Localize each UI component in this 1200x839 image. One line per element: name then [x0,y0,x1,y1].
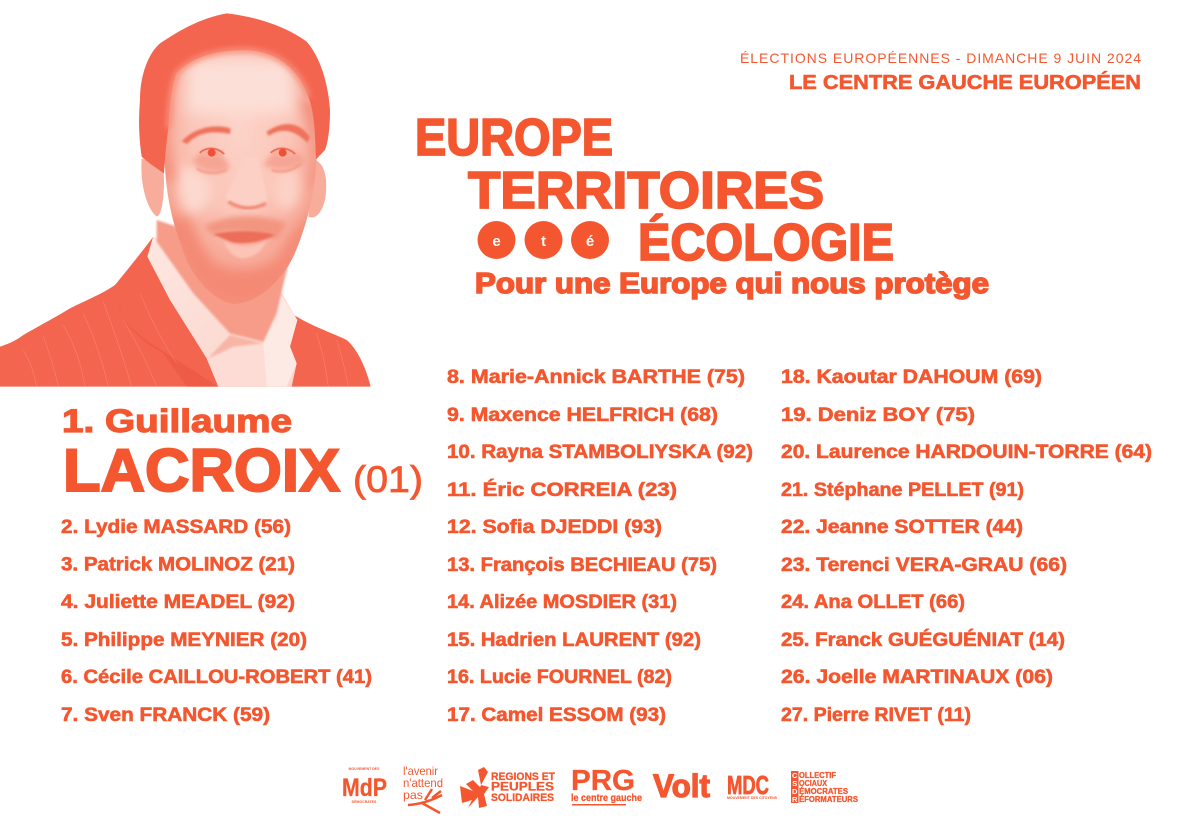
party logos row [342,764,859,813]
logo: MdP: MOUVEMENT DES [349,767,380,771]
candidate surname: LACROIX [63,437,340,504]
candidate list: column 2: 9. Maxence HELFRICH (68) [447,405,718,426]
title line: Écologie: ÉCOLOGIE [638,214,894,272]
candidate list: column 1: 7. Sven FRANCK (59) [61,705,270,726]
icon: e t é circles [478,221,609,259]
photo: Guillaume Lacroix portrait [0,13,371,387]
logo: MDC: MDC [727,770,769,800]
candidate list: column 3 [781,367,1152,726]
logo: Collectif Sociaux Démocrates Réformateurs: ÉMOCRATES [799,787,849,796]
icon: e t é circles: t [541,233,546,250]
logo: Volt: Volt [653,768,710,804]
icon: e t é circles: e [492,233,501,250]
candidate list: column 2: 15. Hadrien LAURENT (92) [447,630,701,651]
logo: Collectif Sociaux Démocrates Réformateurs: R [792,795,798,804]
candidate list: column 3: 26. Joelle MARTINAUX (06) [781,667,1053,688]
candidate list: column 1: 5. Philippe MEYNIER (20) [61,630,307,651]
logo: l'avenir n'attend pas: n'attend [403,776,443,790]
title line: Territoires: TERRITOIRES [468,162,824,220]
logo: Régions et Peuples Solidaires: REGIONS ET [491,771,555,783]
candidate list: column 2: 12. Sofia DJEDDI (93) [447,517,662,538]
candidate list: column 1: 4. Juliette MEADEL (92) [61,592,295,613]
candidate list: column 2: 13. François BECHIEAU (75) [447,555,717,576]
candidate list: column 2: 10. Rayna STAMBOLIYSKA (92) [447,442,753,463]
logo: PRG le centre gauche [571,765,642,806]
header: list name: LE CENTRE GAUCHE EUROPÉEN [789,71,1141,94]
logo: Collectif Sociaux Démocrates Réformateurs: OCIAUX [799,779,828,788]
logo: MdP: DÉMOCRATES [352,799,377,804]
logo: MdP: MdP [342,774,387,802]
logo: Collectif Sociaux Démocrates Réformateurs: S [792,779,797,788]
candidate list: column 1: 3. Patrick MOLINOZ (21) [61,554,295,576]
logo: Collectif Sociaux Démocrates Réformateurs: C [792,771,798,780]
title block [415,109,989,300]
candidate list: column 2: 17. Camel ESSOM (93) [447,705,666,726]
title line: Europe: EUROPE [415,109,613,167]
candidate list: column 2: 8. Marie-Annick BARTHE (75) [447,367,745,388]
candidate list: column 3: 19. Deniz BOY (75) [781,405,975,426]
icon: e t é circles: é [586,233,594,250]
logo: PRG le centre gauche: PRG [571,765,635,797]
candidate list: column 3: 25. Franck GUÉGUÉNIAT (14) [781,629,1065,651]
candidate first name: 1. Guillaume [62,403,292,439]
candidate list: column 1: 2. Lydie MASSARD (56) [61,517,291,538]
candidate list: column 1 [61,517,372,726]
candidate list: column 2: 16. Lucie FOURNEL (82) [447,667,672,688]
candidate list: column 2 [447,367,753,726]
candidate department: (01) [353,459,423,500]
candidate list: column 3: 23. Terenci VERA-GRAU (66) [781,555,1067,576]
logo: MdP [342,767,387,804]
logo: Collectif Sociaux Démocrates Réformateurs: OLLECTIF [799,771,836,780]
candidate list: column 3: 24. Ana OLLET (66) [781,592,965,613]
candidate list: column 3: 21. Stéphane PELLET (91) [781,480,1024,501]
header: election date: ÉLECTIONS EUROPÉENNES - DIMANCHE 9 JUIN 2024 [740,50,1141,66]
candidate list: column 2: 11. Éric CORREIA (23) [447,479,677,501]
candidate list: column 3: 18. Kaoutar DAHOUM (69) [781,367,1042,388]
logo: Régions et Peuples Solidaires: SOLIDAIRES [491,792,554,804]
logo: Collectif Sociaux Démocrates Réformateurs [791,771,859,804]
logo: l'avenir n'attend pas: l'avenir [403,764,438,778]
logo: Collectif Sociaux Démocrates Réformateurs: D [792,787,798,796]
candidate list: column 3: 27. Pierre RIVET (11) [781,705,971,726]
logo: MDC: MOUVEMENT DES CITOYENS [727,796,778,800]
candidate list: column 1: 6. Cécile CAILLOU-ROBERT (41) [61,667,372,688]
logo: Régions et Peuples Solidaires [460,767,555,808]
logo: l'avenir n'attend pas: pas [403,788,423,802]
logo: l'avenir n'attend pas [403,764,443,813]
lead candidate [62,403,423,504]
logo: Régions et Peuples Solidaires: PEUPLES [491,780,554,794]
candidate list: column 3: 20. Laurence HARDOUIN-TORRE (64) [781,442,1152,463]
logo: Collectif Sociaux Démocrates Réformateurs: ÉFORMATEURS [799,795,859,804]
candidate list: column 2: 14. Alizée MOSDIER (31) [447,592,677,613]
logo: PRG le centre gauche: le centre gauche [571,793,642,804]
candidate list: column 3: 22. Jeanne SOTTER (44) [781,517,1023,538]
tagline: Pour une Europe qui nous protège [475,268,989,300]
